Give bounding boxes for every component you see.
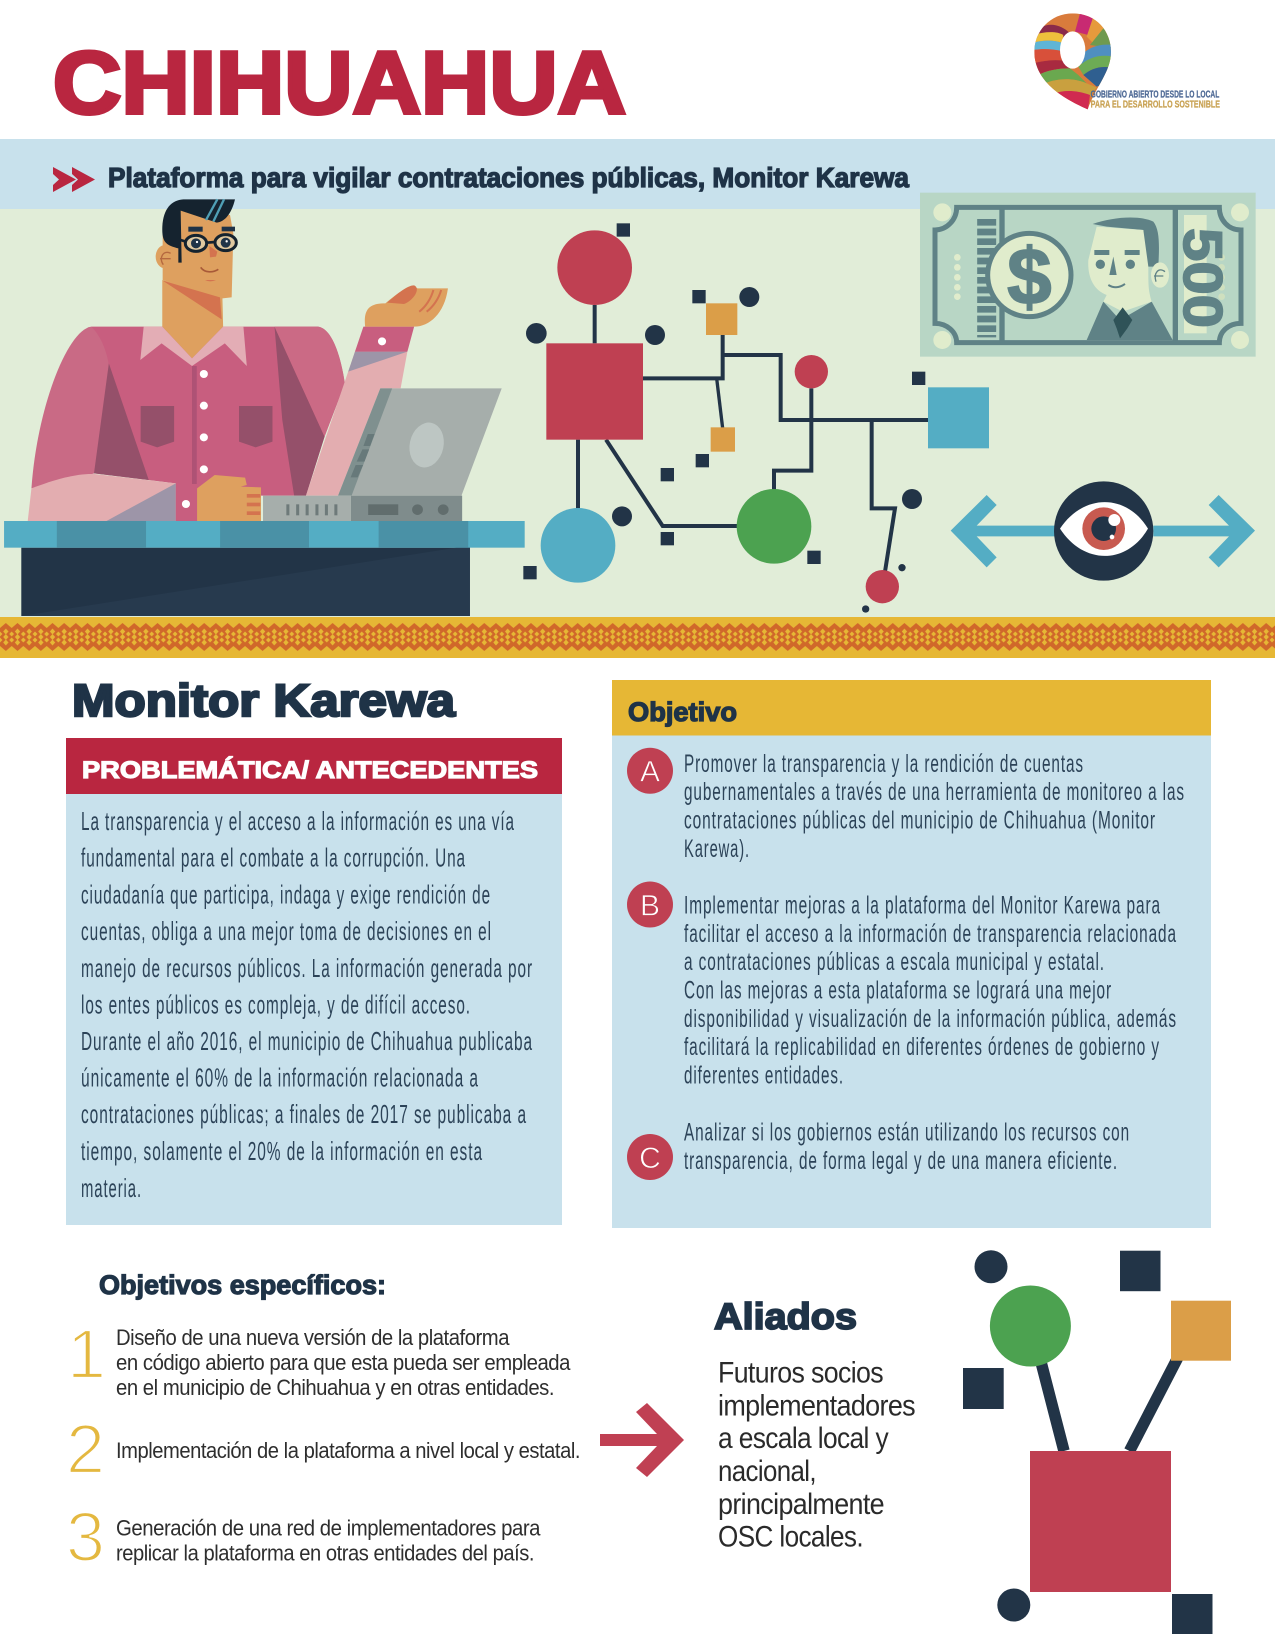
paragraph: tiempo, solamente el 20% de la información en esta bbox=[81, 1136, 483, 1166]
objective A bbox=[627, 748, 1185, 863]
desk top bbox=[4, 521, 525, 548]
objective B bbox=[627, 882, 1177, 1090]
router bbox=[263, 496, 462, 521]
objective header: Objetivo bbox=[628, 697, 737, 727]
specific objective 1: en el municipio de Chihuahua y en otras entidades. bbox=[116, 1375, 554, 1400]
specific objective 1: 1 bbox=[67, 1315, 106, 1393]
heading: aliados: Aliados bbox=[714, 1296, 857, 1337]
decorative patterned band bbox=[0, 617, 1275, 658]
allies text: Futuros socios bbox=[718, 1357, 883, 1390]
specific objective 1: Diseño de una nueva versión de la plataforma bbox=[116, 1325, 510, 1350]
illustration: banknote bbox=[920, 193, 1256, 357]
paragraph: Durante el año 2016, el municipio de Chihuahua publicaba bbox=[81, 1026, 533, 1056]
man head bbox=[156, 199, 236, 319]
logo bbox=[1033, 10, 1220, 112]
allies text bbox=[718, 1357, 915, 1554]
left forearm bbox=[28, 474, 261, 521]
specific objective 2 bbox=[66, 1410, 580, 1488]
specific objective 3: replicar la plataforma en otras entidades del país. bbox=[116, 1541, 534, 1566]
heading: objetivos específicos: Objetivos específicos: bbox=[99, 1270, 386, 1300]
objective B: diferentes entidades. bbox=[684, 1062, 844, 1090]
logo: PARA EL DESARROLLO SOSTENIBLE bbox=[1091, 100, 1220, 111]
paragraph: ciudadanía que participa, indaga y exige rendición de bbox=[81, 879, 491, 909]
specific objective 1 bbox=[67, 1315, 571, 1400]
specific objective 3 bbox=[66, 1498, 541, 1576]
subtitle: Plataforma para vigilar contrataciones públicas, Monitor Karewa bbox=[108, 162, 909, 193]
objective header bbox=[612, 680, 1211, 736]
allies text: a escala local y bbox=[718, 1422, 889, 1455]
paragraph: los entes públicos es compleja, y de difícil acceso. bbox=[81, 990, 471, 1020]
subtitle arrows bbox=[53, 167, 95, 192]
paragraph: manejo de recursos públicos. La información generada por bbox=[81, 953, 533, 983]
specific objective 3: 3 bbox=[66, 1498, 105, 1576]
illustration: banknote: 500 bbox=[1172, 228, 1234, 328]
objective A: A bbox=[640, 756, 660, 788]
paragraph: cuentas, obliga a una mejor toma de decisiones en el bbox=[81, 916, 492, 946]
objective C: C bbox=[639, 1142, 661, 1175]
panel: objetivo bbox=[612, 680, 1211, 1228]
neck and collar bbox=[140, 280, 247, 366]
paragraph: La transparencia y el acceso a la información es una vía bbox=[81, 806, 515, 836]
desk base bbox=[21, 548, 470, 616]
subtitle band background bbox=[0, 139, 1275, 209]
laptop bbox=[338, 388, 502, 496]
raised arm and hand bbox=[306, 285, 448, 496]
allies text: nacional, bbox=[718, 1455, 816, 1488]
title: CHIHUAHUA bbox=[53, 33, 626, 132]
arrow to allies bbox=[600, 1403, 684, 1477]
objective C bbox=[627, 1119, 1130, 1180]
paragraph: fundamental para el combate a la corrupción. Una bbox=[81, 843, 466, 873]
allies network graphic bbox=[963, 1250, 1231, 1634]
specific objective 3: Generación de una red de implementadores para bbox=[116, 1516, 541, 1541]
specific objective 1: en código abierto para que esta pueda ser empleada bbox=[116, 1350, 571, 1375]
specific objective 2: 2 bbox=[66, 1410, 105, 1488]
panel: problemática bbox=[66, 738, 562, 1225]
paragraph: contrataciones públicas; a finales de 2017 se publicaba a bbox=[81, 1099, 527, 1129]
illustration: man at desk with laptop bbox=[4, 280, 525, 616]
eye with double arrow bbox=[951, 481, 1255, 581]
allies text: implementadores bbox=[718, 1390, 915, 1423]
illustration background bbox=[0, 209, 1275, 617]
shirt bbox=[31, 327, 345, 521]
paragraph: únicamente el 60% de la información relacionada a bbox=[81, 1063, 479, 1093]
panel header: PROBLEMÁTICA/ ANTECEDENTES bbox=[82, 756, 538, 784]
heading: Monitor Karewa: Monitor Karewa bbox=[72, 675, 456, 726]
allies text: OSC locales. bbox=[718, 1521, 863, 1554]
panel header bbox=[66, 738, 562, 794]
paragraph bbox=[81, 806, 533, 1203]
objective B: B bbox=[640, 889, 660, 922]
objective A: Karewa). bbox=[684, 835, 750, 863]
paragraph: materia. bbox=[81, 1173, 142, 1203]
allies text: principalmente bbox=[718, 1488, 884, 1521]
network diagram bbox=[523, 223, 989, 613]
illustration: banknote: $ bbox=[1007, 232, 1052, 321]
specific objective 2: Implementación de la plataforma a nivel local y estatal. bbox=[116, 1438, 580, 1463]
